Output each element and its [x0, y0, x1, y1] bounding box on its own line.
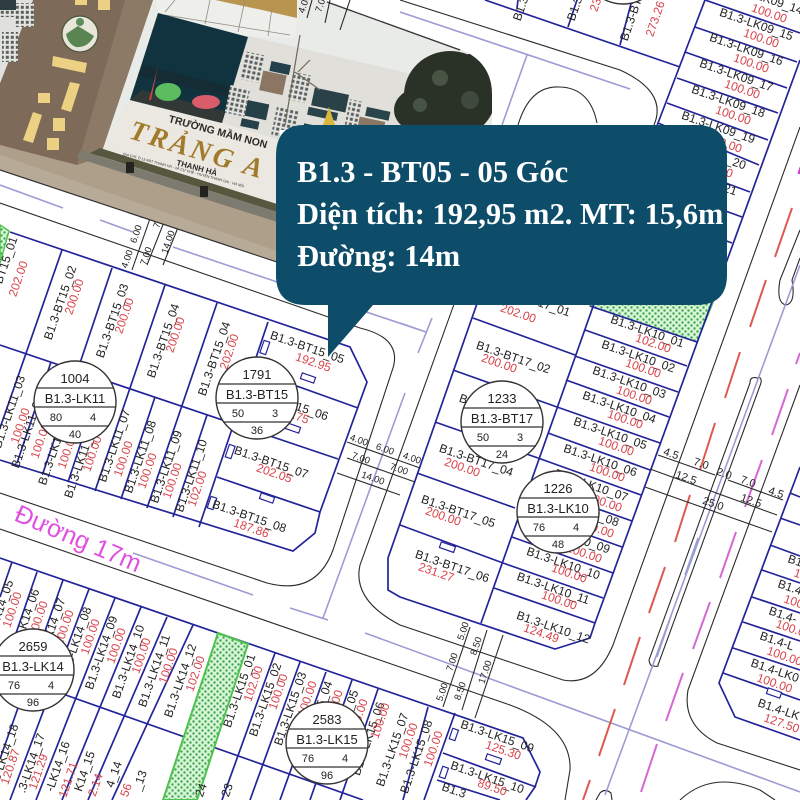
block circle 2659: 96 [27, 697, 39, 709]
callout text: Diện tích: 192,95 m2. MT: 15,6m [297, 197, 723, 231]
plot labels LK14: 100.00 [156, 646, 181, 685]
plot labels LK15: 100.00 [396, 721, 421, 760]
plot labels LK10: B1.3-LK10_12 [515, 608, 592, 646]
plot labels LK09: B1.3-LK09_20 [671, 134, 748, 172]
plot labels LK11: 100.00 [111, 439, 136, 478]
plot labels LK14 [0, 578, 208, 799]
plot labels LK09: 100.00 [696, 156, 735, 181]
photo sign text: THANH HÀ [175, 158, 218, 178]
plot labels BT15: 200.00 [62, 277, 87, 316]
plot labels LK14: 2.14 [85, 771, 106, 798]
plot labels BT15: B1.3-BT15_07 [232, 443, 310, 482]
plot labels LK14: _13 [130, 768, 150, 793]
plot labels LK15 [192, 652, 536, 800]
photo sign text: TRẢNG A [126, 115, 269, 186]
plot labels LK10: 100.00 [577, 516, 616, 541]
plot labels LK10: 100.00 [615, 383, 654, 408]
plot labels LK15: 100.00 [295, 679, 320, 718]
plot labels LK10: 100.00 [585, 490, 624, 515]
block circle 2583: 4 [342, 753, 348, 765]
plot labels top block: 273.26 [643, 0, 668, 38]
road dimension marks: 4.00 [119, 249, 136, 270]
plot labels LK14: 100.00 [52, 608, 77, 647]
plot labels LK09: B1.3-LK09_16 [708, 30, 785, 68]
plot labels LK15: 125.30 [484, 738, 523, 763]
block circle 1233: 1233 [488, 391, 516, 406]
plot labels BT17: B1.3-BT17_01 [494, 281, 572, 320]
plot labels BT15: 200.00 [112, 296, 137, 335]
plot labels LK14: B1.3-LK14_12 [161, 642, 199, 719]
plot labels LK10: B1.3-LK10_09 [535, 518, 612, 556]
road dimension marks: 4.5 [767, 485, 785, 501]
plot labels LK09: B1.3-LK09_15 [718, 5, 795, 43]
plot labels BT17: B1.3-BT17_05 [419, 492, 497, 531]
callout text: B1.3 - BT05 - 05 Góc [297, 155, 568, 189]
plot labels LK14: 121.71 [56, 760, 81, 799]
plot labels LK14: B1.3-LK14_08 [56, 605, 94, 682]
block circle 1226: B1.3-LK10 [527, 501, 589, 516]
plot labels BT17: 200.00 [480, 351, 519, 376]
block circle 1791 [216, 357, 298, 439]
plot labels LK10: 100.00 [597, 434, 636, 459]
plot labels LK09: B1.3-LK09_17 [698, 56, 775, 94]
plot labels LK14: 102.00 [183, 654, 208, 693]
plot labels LK14: 100.00 [78, 617, 103, 656]
road dimension marks: 4.5 [662, 446, 680, 462]
plot labels B1.4 [749, 552, 800, 736]
plot labels LK15: 89.50 [476, 776, 509, 799]
plot labels LK11: 100.00 [80, 434, 105, 473]
plot labels LK09: B1.3-LK09_21 [662, 160, 739, 198]
plot labels LK15: 24 [192, 781, 210, 799]
plot labels LK10: B1.3-LK10_05 [572, 414, 649, 452]
plot labels LK14: 56 [117, 781, 135, 799]
block circle 2659: 76 [8, 680, 20, 692]
plot labels LK15: 102.00 [241, 664, 266, 703]
plot labels LK11: B1.3-LK11_04 [8, 393, 46, 470]
block circle 2659: 4 [48, 680, 54, 692]
plot labels B1.4: B1.4- [767, 604, 799, 626]
block circle 2583: 2583 [313, 712, 341, 727]
plot labels LK15: 100.00 [368, 701, 393, 740]
plot labels LK14: 100.00 [0, 590, 25, 629]
plot labels LK11: B1.3-LK11_08 [121, 418, 159, 495]
plot labels LK10: 100.00 [624, 356, 663, 381]
plot labels LK15: B1.3-LK15_04 [297, 679, 335, 756]
plot labels LK10: 100.00 [540, 588, 579, 613]
plot labels BT17: B1.3-BT17_04 [437, 441, 515, 480]
photo logo [62, 16, 98, 52]
block circle 1233: 3 [517, 432, 523, 444]
plot labels LK14: 100.00 [129, 636, 154, 675]
plot labels LK11: 102.00 [185, 469, 210, 508]
plot labels LK14: K14_15 [71, 749, 98, 793]
block circle 1226: 1226 [544, 481, 572, 496]
plot labels LK15: 100.00 [421, 729, 446, 768]
plot labels LK10: 100.00 [606, 407, 645, 432]
road dimension marks: 14.00 [360, 470, 386, 488]
plot labels BT15: B1.3-BT15_06 [252, 385, 330, 424]
road dimension marks: 6.00 [128, 224, 145, 245]
dimension marks over photo [296, 0, 350, 30]
plot labels LK10: 100.00 [550, 561, 589, 586]
plot labels LK14: .3-LK14_17 [14, 731, 48, 795]
plot labels LK14: 100.00 [26, 599, 51, 638]
plot labels LK15: B1.3-LK15_01 [220, 652, 258, 729]
plot labels BT17 [413, 281, 572, 586]
road dimension marks: 7.00 [388, 461, 409, 478]
plot labels BT15: 200.00 [163, 315, 188, 354]
block circle 2659 [0, 629, 74, 711]
block circle 1004: 1004 [61, 371, 89, 386]
block circle 1004 [34, 361, 116, 443]
plot labels LK14: 100.00 [104, 626, 129, 665]
plot labels LK15: B1.3-LK15_05 [323, 688, 361, 765]
callout text: Đường: 14m [297, 239, 460, 273]
plot labels LK11 [0, 373, 210, 514]
plot labels LK15: B1.3-LK15_10 [449, 758, 526, 796]
plot labels BT17: 200.00 [443, 455, 482, 480]
plot labels LK14: B1.3-LK14_06 [4, 587, 42, 664]
plot labels LK14: 121.29 [26, 752, 51, 791]
plot labels B1.4: B1.4-LK0 [749, 656, 800, 685]
plot labels LK10: B1.3-LK10_02 [600, 337, 677, 375]
plot labels LK11: 100.00 [8, 406, 33, 445]
block circle 1004: 40 [69, 429, 81, 441]
road dimension marks: 4.00 [401, 450, 422, 467]
plot labels LK10: B1.3-LK10_07 [553, 466, 630, 504]
plot labels LK11: 100.00 [28, 421, 53, 460]
plot labels BT17: 202.00 [499, 301, 538, 326]
road dimension marks: 8.50 [468, 636, 485, 657]
plot labels BT15: 202.05 [255, 461, 294, 486]
plot labels LK14: B1.3-LK14_11 [135, 632, 173, 709]
plot labels LK11: 100.00 [160, 461, 185, 500]
plot labels LK09: 100.00 [732, 51, 771, 76]
plot labels LK15: B1.3-LK15_03 [271, 670, 309, 747]
callout [276, 125, 727, 357]
plot labels LK15: B1.3-LK15_02 [246, 661, 284, 738]
road dimension marks: 7.0 [692, 456, 710, 472]
plot labels LK14: B1.3-LK14_09 [82, 614, 120, 691]
plot labels LK09: 100.00 [714, 103, 753, 128]
road dimension marks [119, 199, 785, 718]
plot labels BT15: B1.3-BT15_02 [41, 264, 80, 342]
plot labels LK15: 100.00 [346, 697, 371, 736]
plot labels BT15: B1.3-BT15_05 [268, 328, 346, 367]
road dimension marks: 6.00 [374, 441, 395, 458]
photo edge line [0, 2, 460, 262]
plot labels LK15: 100.00 [321, 688, 346, 727]
plot labels BT15: B1.3-BT15_04 [144, 302, 183, 380]
plot labels LK15: B1.3-LK15_09 [459, 717, 536, 755]
plot labels B1.4: 100.00 [755, 671, 795, 696]
road dimension marks: 8.50 [452, 681, 469, 702]
plot labels LK09: 100.00 [723, 77, 762, 102]
block circle 1226: 4 [573, 522, 579, 534]
plot labels LK10: 100.00 [588, 460, 627, 485]
plot labels BT17: B1.3-BT17_06 [413, 547, 491, 586]
block circle 1004: B1.3-LK11 [45, 391, 105, 406]
block B1.4 outlines [719, 467, 800, 740]
plot labels LK10: 124.49 [522, 621, 561, 646]
plot labels LK11: B1.3-LK11_10 [172, 437, 210, 514]
plot labels LK09: 100.00 [705, 131, 744, 156]
block circle 2659: B1.3-LK14 [2, 659, 64, 674]
plot labels BT15: 192.95 [294, 350, 333, 375]
block circle 2583: B1.3-LK15 [296, 732, 358, 747]
plot labels BT17: 200.00 [424, 504, 463, 529]
road dimension marks: 7.0 [739, 474, 757, 490]
block circle 1791: 50 [232, 408, 244, 420]
plot labels LK10: B1.3-LK10_03 [591, 363, 668, 401]
plot labels LK14: -LK14_16 [43, 739, 73, 793]
plot labels LK14: B1.3-LK14_07 [30, 596, 68, 673]
block circle 1791: 36 [251, 425, 263, 437]
plot labels BT15 [0, 235, 346, 541]
block circle 1226: 48 [552, 539, 564, 551]
road dimension marks: 25.0 [701, 495, 725, 513]
road label: Đường 17m: Đường 17m [11, 500, 145, 578]
road dimension marks: 7.00 [138, 246, 155, 267]
road dimension marks: 12.5 [674, 469, 698, 487]
plot labels LK10: B1.3-LK10_10 [525, 544, 602, 582]
block circle 1226: 76 [533, 522, 545, 534]
plot labels BT17: 231.27 [417, 560, 456, 585]
plot labels B1.4: B1.4-L [758, 629, 796, 653]
block BT17 and LK10 outlines [388, 0, 800, 649]
plot labels LK10: 100.00 [565, 541, 604, 566]
block circle 1233: 50 [477, 432, 489, 444]
plot labels LK10 [515, 312, 686, 646]
road dimension marks: 4.00 [135, 199, 152, 220]
plot labels LK09: B1.3-LK09_18 [690, 82, 767, 120]
block circle 2659: 2659 [19, 639, 47, 654]
plot labels LK09 [662, 0, 800, 198]
road dimension marks: 17.00 [477, 659, 495, 685]
photo sign text: ĐỊA CHỈ: Ô 13 KĐT THANH HÀ - XÃ CỰ KHÊ - HUYỆN THANH OAI - HÀ NỘI [123, 151, 245, 188]
photo tree [394, 51, 492, 125]
photo sign text [77, 112, 277, 222]
plot labels LK14: B1.3-LK14_10 [109, 623, 147, 700]
photo sign text: TRƯỜNG MẦM NON [167, 112, 269, 151]
road dimension marks: 2.0 [715, 466, 733, 482]
block circle 1004: 80 [50, 412, 62, 424]
plot labels top block [510, 0, 668, 43]
plot labels LK09: B1.3-LK09_19 [680, 108, 757, 146]
block circle 1004: 4 [90, 412, 96, 424]
block LK14 and LK15 outlines [0, 558, 540, 800]
plot labels LK14: 4_14 [103, 759, 125, 789]
plot labels LK10: B1.3-LK10_08 [544, 491, 621, 529]
block circle top (cropped) [582, 0, 664, 4]
plot labels LK15: B1.3-LK15_08 [397, 718, 435, 795]
plot labels BT15: B1.3-BT15_03 [93, 282, 132, 360]
plot labels LK11: 100.00 [55, 431, 80, 470]
block circle 1791: 3 [272, 408, 278, 420]
plot labels LK11: B1.3-LK11_05 [35, 410, 73, 487]
plot labels LK10: 102.00 [634, 331, 673, 356]
block circle 1791: 1791 [243, 367, 271, 382]
block circle 1791: B1.3-BT15 [226, 387, 288, 402]
plot labels BT17: B1.3-BT17_03 [457, 391, 535, 430]
plot labels LK11: B1.3-LK11_06 [61, 423, 99, 500]
road dimension marks: 14.00 [160, 229, 178, 255]
plot labels LK15: B1.3-LK15_06 [349, 700, 387, 777]
plot labels LK10: B1.3-LK10_01 [609, 312, 686, 350]
plot labels LK15: 100.00 [266, 672, 291, 711]
block circle 1233: B1.3-BT17 [471, 411, 533, 426]
road dimension marks: 12.5 [739, 492, 763, 510]
road dimension marks: 7.00 [444, 652, 461, 673]
plot labels BT15: 202.00 [217, 332, 242, 371]
block BT15 and LK11 outlines [0, 225, 367, 551]
plot labels LK10: B1.3-LK10_11 [515, 569, 592, 607]
plot labels BT15: 202.00 [6, 259, 31, 298]
block circle 1226 [517, 471, 599, 553]
plot labels BT17: 200.00 [462, 404, 501, 429]
photo: Tràng An kindergarten entrance [0, 0, 500, 270]
callout text [297, 155, 723, 273]
plot labels LK11: B1.3-LK11_09 [147, 428, 185, 505]
block circle 2583: 96 [321, 770, 333, 782]
plot labels LK15: B1.3-LK15_07 [373, 711, 411, 788]
plot labels LK10: B1.3-LK10_06 [562, 441, 639, 479]
road dimension marks: 4.00 [348, 432, 369, 449]
road dimension marks: 7.00 [151, 209, 168, 230]
plot labels LK10: B1.3-LK10_04 [581, 388, 658, 426]
plot labels BT17: B1.3-BT17_02 [474, 338, 552, 377]
plot labels LK11: 100.00 [135, 451, 160, 490]
block circle 2583: 76 [302, 753, 314, 765]
block circle 1233: 24 [496, 449, 508, 461]
plot labels LK09: 100.00 [742, 26, 781, 51]
road dimension marks: 5.00 [434, 682, 451, 703]
plot labels LK11: B1.3-LK11_07 [95, 407, 133, 484]
plot labels BT15: 187.86 [232, 516, 271, 541]
plot labels BT15: 192.75 [272, 402, 311, 427]
plot labels BT15: B1.3-BT15_04 [195, 320, 234, 398]
block circle 2583 [286, 702, 368, 784]
plot labels BT15: B1.3-BT15_08 [210, 497, 288, 536]
plot labels LK09: 100.00 [750, 1, 789, 26]
plot labels LK15: 23 [218, 781, 236, 799]
road dimension marks: 7.00 [350, 450, 371, 467]
block circle 1233 [461, 381, 543, 463]
road dimension marks: 5.00 [455, 621, 472, 642]
